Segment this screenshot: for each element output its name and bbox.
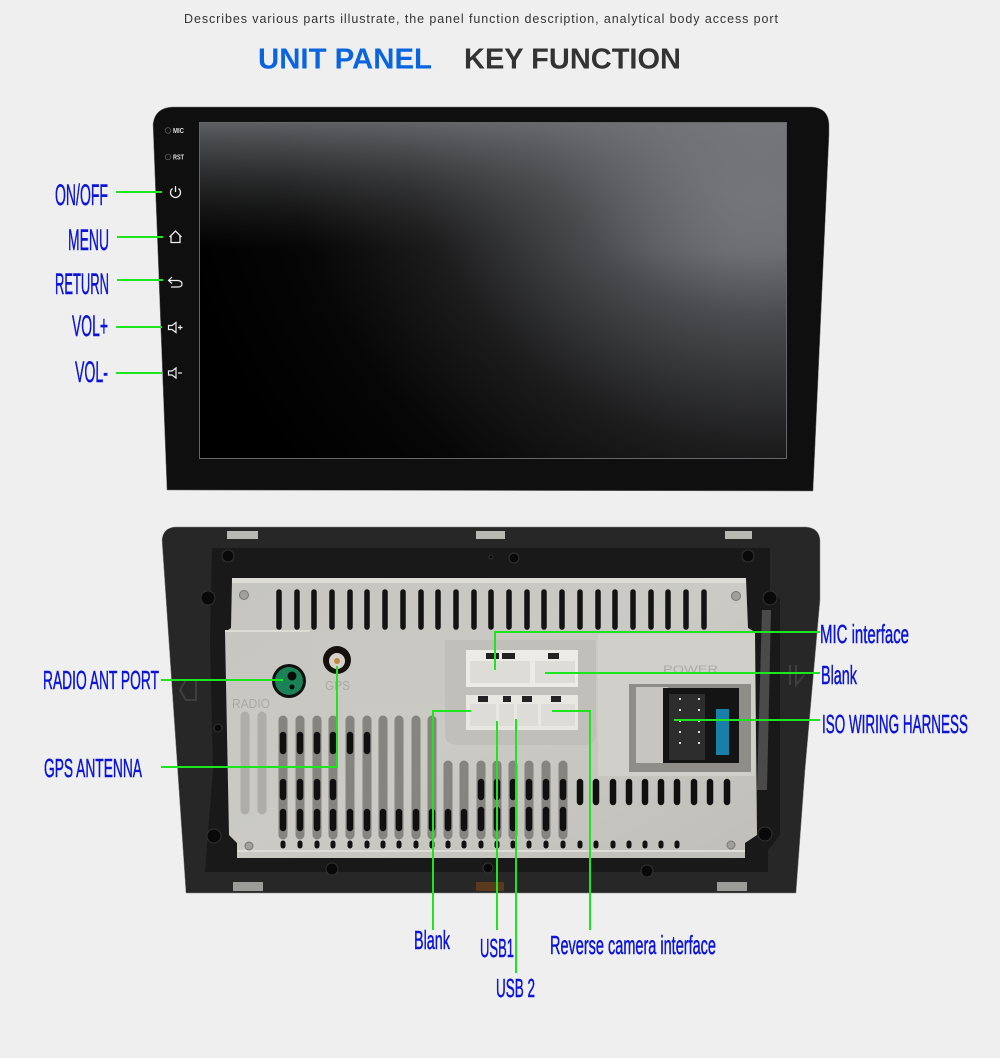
antenna plate <box>310 632 596 704</box>
callout: ON/OFF: ON/OFF <box>55 179 108 212</box>
callouts: rear panel <box>43 619 968 1003</box>
ISO connector <box>629 684 751 772</box>
rear housing <box>162 527 820 893</box>
callout: GPS antenna <box>44 666 337 783</box>
housing embossed marks <box>180 665 804 700</box>
callout: MENU: MENU <box>68 224 109 257</box>
RADIO marking: RADIO <box>232 696 270 711</box>
callout: MIC interface <box>495 619 909 670</box>
inner recess <box>205 548 780 872</box>
chassis screws <box>240 590 740 850</box>
title <box>258 44 681 76</box>
GPS port <box>323 646 351 674</box>
top vent slots <box>279 592 704 627</box>
callout: radio antenna port: RADIO ANT PORT <box>43 665 159 695</box>
callouts: front panel <box>55 179 163 389</box>
icon: volume up <box>168 322 182 332</box>
rear unit panel <box>162 527 820 893</box>
mounting screws <box>201 550 777 877</box>
bottom clips <box>233 882 747 891</box>
chassis upper ledge <box>225 578 746 852</box>
fuse <box>716 709 729 755</box>
callout: USB1: USB1 <box>480 933 514 963</box>
icon: home <box>170 231 182 242</box>
radio antenna port <box>272 664 306 698</box>
upper connector block <box>466 650 578 687</box>
metal chassis <box>225 578 757 858</box>
callout: Reverse camera interface <box>550 711 716 960</box>
RST hole and label: RST <box>173 154 185 162</box>
touch screen <box>200 122 786 458</box>
callout: RETURN: RETURN <box>55 268 109 301</box>
POWER marking: POWER <box>663 664 718 676</box>
GPS marking: GPS <box>325 678 350 693</box>
lower connector block <box>466 695 578 730</box>
callout: USB 2: USB 2 <box>496 973 535 1003</box>
dark cooling channels <box>283 720 563 835</box>
light chassis grooves <box>245 716 262 810</box>
icon: volume down <box>168 368 182 378</box>
top clips <box>227 531 752 539</box>
front unit panel <box>153 107 829 491</box>
front bezel <box>153 107 829 491</box>
callout: Blank bottom: Blank <box>414 925 451 955</box>
black cooling holes <box>283 735 727 828</box>
connector recess <box>445 640 596 745</box>
icon: power <box>170 186 180 198</box>
callout: VOL-: VOL- <box>75 356 108 389</box>
callout: Blank right: Blank <box>821 660 858 690</box>
bottom slots row <box>283 843 677 846</box>
callout: Blank bottom <box>414 711 471 955</box>
RST hole and label <box>165 154 185 162</box>
MIC hole and label: MIC <box>173 128 184 135</box>
callout: VOL+: VOL+ <box>72 310 108 343</box>
callout: Reverse camera interface: Reverse camera interface <box>550 930 716 960</box>
title: UNIT PANEL <box>258 44 432 76</box>
title: KEY FUNCTION <box>464 44 681 76</box>
subtitle: Describes various parts illustrate, the panel function description, analytical body access port <box>184 12 779 26</box>
MIC hole and label <box>165 128 184 135</box>
recess lighter side <box>757 610 771 790</box>
callout: MIC interface: MIC interface <box>820 619 909 649</box>
callout: GPS antenna: GPS ANTENNA <box>44 753 142 783</box>
power plate <box>598 634 755 776</box>
icon: back <box>168 277 182 287</box>
